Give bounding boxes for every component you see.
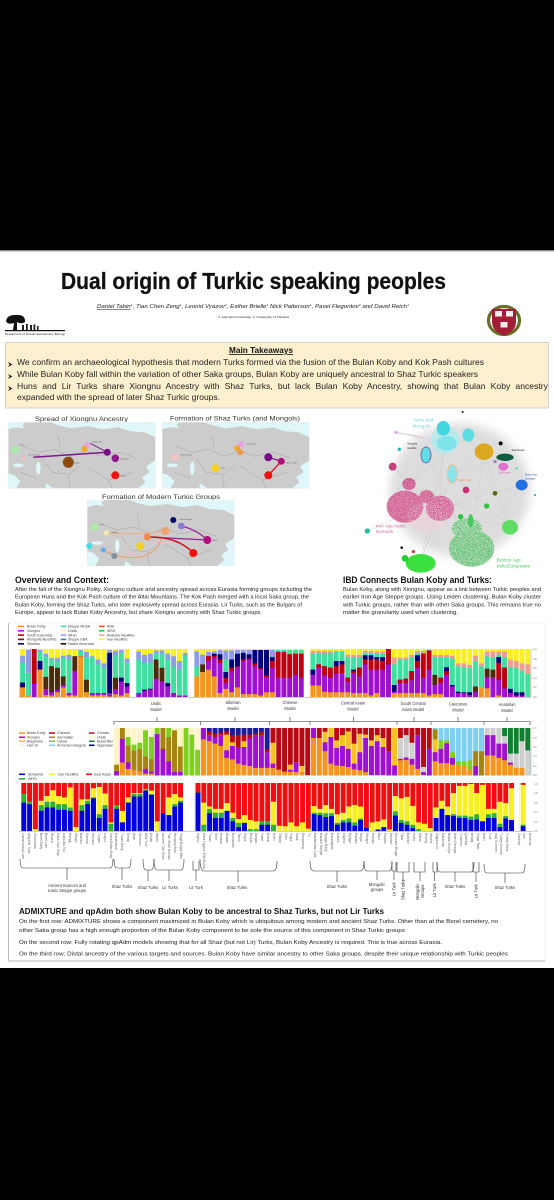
logo: Harvard shield (488, 306, 520, 336)
population labels under third row: Karakhanid (114, 833, 118, 850)
label: Uralic Model: Uralic (151, 701, 161, 706)
label: Caucasus Model (449, 702, 467, 712)
map panel: formation of Shaz Turks (162, 416, 309, 488)
population labels under third row: Bashkir (79, 833, 83, 845)
label: Anatolian Model: Anatolian (498, 702, 516, 707)
label: South Central Asian Model: South Central (400, 701, 426, 706)
population labels under third row: Tian Shan Nomad (167, 833, 171, 860)
legend: ADMIXTURE components: Steppe EBA (68, 638, 88, 642)
third row axis: 1.0 (534, 782, 538, 786)
legend: distal ancestry: East Asian (94, 772, 111, 776)
population labels under third row: Gagauz Lir (435, 833, 439, 850)
chart: IBD network (364, 411, 538, 573)
population labels under third row: Turkey Central (499, 833, 503, 855)
third row description: On the third row: Distal ancestry of the various targets and sources. Bulan Koby have similar ancestry to other Saka groups, despite their unique relationship with Turkic peoples (19, 952, 508, 958)
map panel: formation of modern Turkic groups: Bulgar (111, 531, 118, 534)
map panel: formation of Shaz Turks: Kok Pash (246, 443, 256, 445)
map panel: formation of Shaz Turks: Formation of Shaz Turks (and Mongols) (170, 416, 300, 422)
map panel: spread of Xiongnu ancestry: Spread of Xiongnu Ancestry (35, 416, 129, 423)
population labels under third row: Kyrgyz (348, 833, 352, 843)
label: Anatolian Model (498, 702, 516, 713)
network small labels: Bronze Age (525, 474, 538, 477)
group braces and labels (20, 859, 525, 900)
population labels under third row: Turgen (97, 833, 101, 843)
population labels under third row: Karachay (441, 833, 445, 847)
population labels under third row: Mont Uyghur Elite Burial (202, 833, 206, 869)
text block: IBD connects Bulan Koby and Turks (342, 575, 541, 616)
brace: Mongolic groups: Mongolic (369, 882, 385, 887)
legend: ADMIXTURE components: Bulan Koby (27, 624, 46, 628)
brace: Lir Turk rotated 2 (432, 862, 437, 897)
population labels under third row: Ancient Tian Shan (161, 833, 165, 860)
text block: overview and context: After the fall of the Xiongnu Polity, Xiongnu culture and ancestry spread across Eurasia forming groups including the (15, 587, 312, 593)
population labels under third row: Sardinia (517, 833, 521, 845)
brace: Shaz Turks 6 (484, 864, 525, 890)
label: Chinese Model (282, 700, 298, 711)
population labels under third row: Volga Bulgar Elite (179, 833, 183, 859)
population labels under third row: Buryat (249, 833, 253, 843)
logo: Department of Human Evolutionary Biology (5, 315, 66, 336)
population labels under third row: Turk (488, 833, 492, 840)
population labels under third row: Volga Tatar (476, 833, 480, 850)
label: Central Asian Model (341, 700, 366, 712)
legend: ADMIXTURE components (18, 624, 135, 646)
population labels under third row: Chandman (33, 833, 37, 849)
population labels under third row: Tuvan Early (120, 833, 124, 851)
population labels under third row: Azeri (482, 833, 486, 841)
population labels under third row: Mongol (365, 833, 369, 844)
brace: Shaz Turks 3 (200, 859, 277, 890)
population labels under third row: Saka Ala Too (62, 833, 66, 852)
population labels under third row: Saka Tian Shan (56, 833, 60, 856)
population labels under third row (21, 833, 532, 869)
population labels under third row: Uralic (412, 833, 416, 842)
poster sheet (0, 250, 554, 968)
label: Central Asian Model: Central Asian (341, 700, 366, 706)
label: Caucasus Model: Model (452, 708, 464, 712)
third row axis: 0.6 (534, 801, 538, 805)
label: Chinese Model: Model (284, 706, 296, 711)
legend: qpAdm sources: Sarmatian (57, 735, 73, 739)
population labels under third row: Khanty (424, 833, 428, 844)
chart: second row qpAdm bars (113, 728, 530, 776)
label: Central Asian Model: Model (347, 706, 359, 712)
text block: IBD connects Bulan Koby and Turks: IBD Connects Bulan Koby and Turks: (343, 575, 492, 585)
first row axis: 0.8 (533, 657, 537, 661)
text block: overview and context: Bulan Koby, forming the Shaz Turks, who later explosively spread across Eurasia. Lir Turks, such as the Bulgars of (15, 602, 302, 608)
takeaway 3: Huns and Lir Turks share Xiongnu Ancestry with Shaz Turks, but lack Bulan Koby Ancestry, showing that Bulan Koby ancestry (17, 381, 549, 391)
brace: Shaz Turks 2 (138, 859, 158, 890)
population labels under third row: Lamanovsky Late (21, 833, 25, 859)
label: South Central Asian Model: Asian Model (402, 707, 424, 712)
label: Uralic Model: Model (150, 707, 162, 712)
map panel: spread of Xiongnu ancestry: China (120, 475, 127, 477)
population labels under third row: Salar (295, 833, 299, 842)
model brackets (114, 717, 530, 725)
takeaway 3: expanded with the spread of later Shaz Turkic groups. (17, 392, 220, 402)
text block: IBD connects Bulan Koby and Turks: Bulan Koby, along with Xiongnu, appear as a link between Turkic peoples and (343, 587, 541, 593)
label: South Central Asian Model (400, 701, 426, 712)
population labels under third row: Altai Turk (144, 833, 148, 847)
population labels under third row: Kazakh Steppe (319, 833, 323, 856)
legend: ADMIXTURE components: WHG (68, 633, 77, 637)
first row axis: 0.0 (533, 695, 537, 699)
brace: Lir Turk rotated (392, 862, 396, 896)
authors: Daniel Tabin 1, Tian Chen Zeng 1, Leonid Vyazov 2, Esther Brielle 1 Nick Patterson 1, Pavel Flegontov 2 and David Reich 1 (97, 303, 409, 310)
brace: Shaz Turks 1: Shaz Turks (112, 884, 132, 889)
map panel: formation of Shaz Turks: Saka (220, 467, 226, 469)
legend: ADMIXTURE components: Steppe MLBA (68, 624, 91, 628)
bullet arrows (8, 362, 12, 391)
cluster: Bronze Age Indo-Europeans (400, 503, 518, 573)
population labels under third row: Yugur (289, 833, 293, 843)
third row axis: 0.2 (534, 820, 538, 824)
network small labels (408, 443, 538, 482)
population labels under third row: Even (272, 833, 276, 841)
legend: ADMIXTURE components: Xiongnu (27, 629, 40, 633)
population labels under third row: Kyrgyz Early (324, 833, 328, 852)
population labels under third row: Tuvan (208, 833, 212, 842)
legend: distal ancestry: WHG (28, 777, 37, 781)
population labels under third row: Mansi (418, 833, 422, 842)
population labels under third row: Dolgan (254, 833, 258, 844)
first row axis: 0.2 (533, 685, 537, 689)
population labels under third row: Armenia (528, 833, 532, 845)
population labels under third row: Soyot (243, 833, 247, 842)
label: Siberian Model: Model (227, 706, 239, 711)
first row description (19, 919, 498, 934)
third row axis: 0.8 (534, 791, 538, 795)
map panel: formation of modern Turkic groups (86, 494, 234, 566)
population labels under third row: Tatar (400, 833, 404, 841)
first row description: On the first row: ADMIXTURE shows a component maximized in Bulan Koby which is ubiquitous among modern and ancient Shaz Turks. Other than at the Berel cemetery, no (19, 919, 498, 925)
population labels under third row: Kazakh (354, 833, 358, 844)
population labels under third row: Tofalar (278, 833, 282, 844)
population labels under third row: Uzbek (336, 833, 340, 843)
cluster: gold, dark green, orchid, blue (462, 411, 536, 496)
first row axis: 1.0 (533, 647, 537, 651)
logo: Department of Human Evolutionary Biology: Department of Human Evolutionary Biology (5, 332, 66, 336)
network label: Bronze Age Indo-Europeans (497, 557, 530, 568)
population labels under third row: Hezhen (389, 833, 393, 845)
brace: Shaz Turks 6: Shaz Turks (495, 885, 515, 890)
legend: ADMIXTURE components: Native American (68, 642, 94, 646)
brace: Shaz Turks 5: Shaz Turks (445, 884, 465, 889)
population labels under third row: Qashqai (464, 833, 468, 846)
network label: Iron Age Iranic Nomads: Nomads (376, 529, 394, 534)
chart: first row ADMIXTURE bars (19, 649, 530, 697)
legend: ADMIXTURE components: Uralic (68, 629, 77, 633)
population labels under third row: Balkar Kumyk (447, 833, 451, 854)
population labels under third row: Bashkir (406, 833, 410, 845)
brace: Lir Turk (189, 861, 204, 890)
text block: overview and context: European Huns and the Kok Pash culture of the Altai Mountains. The Kok Pash merged with a local Saka group, the (15, 595, 309, 601)
legend: ADMIXTURE components: South East Asia (27, 633, 52, 637)
network label: Turks and Mongols: Mongols (413, 424, 431, 429)
network small labels: Mongolia (408, 443, 418, 445)
label: Uralic Model (150, 701, 162, 712)
population labels under third row: Nogai (359, 833, 363, 842)
population labels under third row: Shoroon (138, 833, 142, 846)
second row axis (531, 726, 537, 777)
legend: ADMIXTURE components: ANE (107, 624, 115, 628)
model labels and brackets (114, 700, 530, 725)
population labels under third row: Iran (522, 833, 526, 839)
network label: Bronze Age Indo-Europeans: Indo-Europeans (497, 563, 530, 568)
first row axis (19, 647, 537, 699)
map panel: formation of Shaz Turks: Hun Europe (180, 453, 193, 456)
population labels under third row: Uzgur (103, 833, 107, 843)
label: Chinese Model: Chinese (282, 700, 298, 705)
panel frame: ADMIXTURE section (8, 623, 545, 961)
brace: Mongolic Groups rotated (414, 862, 425, 900)
first row axis: 0.4 (533, 676, 537, 680)
third row axis: 0.4 (534, 810, 538, 814)
text block: IBD connects Bulan Koby and Turks: earlier Iron Age Steppe groups. Using Leiden clustering, Bulan Koby cluster (343, 595, 541, 601)
brace: Mongolic groups: groups (371, 887, 383, 892)
first row axis: 0.6 (533, 666, 537, 670)
legend: qpAdm sources (19, 731, 114, 747)
text block: overview and context: Europe, appear to lack Bulan Koby Ancestry, but share Xiongnu ancestry with Shaz Turkic groups. (15, 610, 262, 616)
population labels under third row: Teleut (237, 833, 241, 842)
legend: ADMIXTURE components: WSH (107, 629, 116, 633)
panel: main takeaways (6, 342, 549, 408)
map panel: formation of modern Turkic groups: Shaz (212, 540, 217, 542)
population labels under third row: Khitan (149, 833, 153, 843)
population labels under third row: Mingyi (74, 833, 78, 843)
map panel: spread of Xiongnu ancestry: Saka (74, 462, 80, 464)
population labels under third row: Khakas (219, 833, 223, 844)
population labels under third row: Uyghur (342, 833, 346, 845)
population labels under third row: Evenk (266, 833, 270, 843)
network small labels: Neolithic (408, 447, 417, 450)
legend: qpAdm sources: Chinese (57, 731, 70, 735)
legend: qpAdm sources: Uzbek (57, 739, 67, 743)
affiliations: 1: Harvard University, 2: University of Ostrava (218, 315, 290, 319)
population labels under third row: Kangju (68, 833, 72, 843)
network small labels: Scandinavia (512, 450, 525, 452)
map panel: spread of Xiongnu ancestry: Kok Pash (92, 441, 102, 443)
population labels under third row: Berel Early (39, 833, 43, 849)
brace: Lir Turk: Lir Turk (189, 885, 204, 890)
text block: overview and context (15, 575, 312, 616)
label: Siberian Model (225, 700, 241, 711)
population labels under third row: Berel Late (44, 833, 48, 848)
brace: Shaz Turks rotated (397, 862, 409, 900)
brace: Lir Turk rotated 2: Lir Turk (432, 882, 437, 897)
second row axis: 0.8 (533, 736, 537, 740)
brace: Shaz Turks 1 (112, 859, 132, 889)
first row description: other Saka group has a high enough proportion of the Bulan Koby component to be sole the source of this component in Shaz Turkic groups (19, 928, 405, 934)
legend: ADMIXTURE components: Iran Neolithic (107, 638, 128, 642)
second row axis: 0.2 (533, 764, 537, 768)
network small labels: Caucasus (525, 478, 536, 480)
text block: overview and context: Overview and Context: (15, 575, 109, 585)
legend: qpAdm sources: Xiongnu (27, 735, 40, 739)
brace: Shaz Turks 3: Shaz Turks (227, 885, 247, 890)
population labels under third row: Kimak (126, 833, 130, 843)
section heading: ADMIXTURE and qpAdm both show Bulan Koby to be ancestral to Shaz Turks, but not Lir Turks (19, 906, 384, 916)
label: Caucasus Model: Caucasus (449, 702, 467, 706)
legend: qpAdm sources: Uralic (97, 735, 106, 739)
population labels under third row: Dongxiang (301, 833, 305, 849)
population labels under third row: Nenets (429, 833, 433, 844)
brace: Lir Turks (154, 859, 184, 890)
brace: Shaz Turks 2: Shaz Turks (138, 885, 158, 890)
legend: qpAdm sources: Han III (27, 743, 38, 747)
population labels under third row: Aldy-Bel Tuva (27, 833, 31, 854)
legend: ADMIXTURE components: Siberian (27, 642, 40, 646)
brace: Shaz Turks 4: Shaz Turks (327, 884, 347, 889)
legend: ADMIXTURE components: Mongolia Neolithic (27, 638, 57, 642)
legend: qpAdm sources: Armenia Hotagula (57, 743, 86, 747)
legend: distal ancestry: Iran Neolithic (58, 772, 79, 776)
cluster: Iron Age Iranic Nomads (365, 463, 469, 534)
legend: qpAdm sources: Chuvan (97, 731, 109, 735)
brace: Lir Turk rotated 3 (473, 862, 479, 898)
population labels under third row: Alanic (155, 833, 159, 842)
network small labels: South Asian (498, 472, 511, 475)
population labels under third row: Tu (307, 833, 311, 837)
map panel: formation of modern Turkic groups: Ural (99, 523, 104, 526)
map panel: spread of Xiongnu ancestry: Xiongnu (120, 458, 129, 460)
second row axis: 1.0 (533, 726, 537, 730)
brace: Lir Turk rotated: Lir Turk (392, 881, 396, 896)
title: Dual origin of Turkic speaking peoples (61, 268, 446, 294)
legend: qpAdm sources: Nganasan (97, 743, 113, 747)
population labels under third row: Hungary Avar (173, 833, 177, 854)
network label: Turks and Mongols (413, 418, 434, 429)
third row axis: 0.0 (534, 829, 538, 833)
text block: IBD connects Bulan Koby and Turks: matter the granularity used when clustering. (343, 610, 458, 616)
population labels under third row: Kalmyk (371, 833, 375, 844)
population labels under third row: Uighur (196, 833, 200, 844)
network haze (367, 423, 530, 563)
population labels under third row: Yakut (260, 833, 264, 841)
population labels under third row: Karakalpak (330, 833, 334, 850)
population labels under third row: Saka Bulan Koby (109, 833, 113, 859)
map panel: formation of Shaz Turks: Shaz Turks (286, 461, 298, 464)
map panel: formation of modern Turkic groups: Formation of Modern Turkic Groups (102, 494, 221, 501)
takeaway 3 (17, 381, 549, 402)
population labels under third row: Wusun (50, 833, 54, 843)
network label: Bronze Age Indo-Europeans: Bronze Age (497, 557, 521, 562)
map panel: spread of Xiongnu ancestry: Ural (19, 443, 24, 446)
network label: Iron Age Iranic Nomads (376, 523, 406, 534)
population labels under third row: Altaian (225, 833, 229, 843)
second row axis: 0.0 (533, 773, 537, 777)
brace: Shaz Turks 4 (310, 861, 364, 889)
second row axis: 0.6 (533, 745, 537, 749)
population labels under third row: Xibo (284, 833, 288, 840)
population labels under third row: Kazakhstan Late (313, 833, 317, 858)
brace: Ancient Sources and Iranic Steppe groups: Iranic Steppe groups (48, 888, 86, 893)
takeaway 2: While Bulan Koby fall within the variation of other Saka groups, Bulan Koby are uniquely ancestral to Shaz Turkic speakers (17, 369, 478, 379)
brace: Ancient Sources and Iranic Steppe groups: Ancient Sources and (48, 883, 87, 888)
brace: Mongolic groups (364, 861, 392, 892)
population labels under third row: Oroqen (383, 833, 387, 844)
label: Anatolian Model: Model (501, 708, 513, 713)
population labels under third row: Avar (132, 833, 136, 841)
legend: qpAdm sources: Bulan Koby (27, 731, 46, 735)
map panel: spread of Xiongnu ancestry: Hun Europe (28, 453, 41, 456)
population labels under third row: Kumandin (231, 833, 235, 848)
brace: Lir Turks: Lir Turks (162, 885, 178, 890)
population labels under third row: Chuvash Bulgar (394, 833, 398, 857)
population labels under third row: Sarmat (85, 833, 89, 844)
chart: third row distal ancestry bars (21, 783, 526, 831)
legend: distal ancestry (19, 772, 112, 782)
population labels under third row: Turkey West (505, 833, 509, 851)
legend: ADMIXTURE components: Anatolia Neolithic (107, 633, 135, 637)
population labels under third row: Iraq Turkmen (494, 833, 498, 853)
population labels under third row: Turkmen (459, 833, 463, 846)
network small labels: Bulan Koby (459, 480, 472, 482)
text block: ADMIXTURE and qpAdm conclusions (19, 906, 508, 958)
takeaway 1: We confirm an archaeological hypothesis that modern Turks formed via the fusion of the Bulan Koby and Kok Pash cultures (17, 357, 484, 367)
brace: Shaz Turks 5 (437, 862, 474, 889)
label: Siberian Model: Siberian (225, 700, 241, 705)
brace: Mongolic Groups rotated: Mongolic (415, 884, 420, 900)
population labels under third row: Daur (377, 833, 381, 841)
network label: Iron Age Iranic Nomads: Iron Age Iranic (376, 523, 406, 528)
legend: qpAdm sources: Baigetobe (27, 739, 43, 743)
third row axis (19, 782, 538, 833)
takeaways heading: Main Takeaways (229, 346, 294, 355)
map panel: spread of Xiongnu ancestry (8, 416, 155, 488)
brace: Shaz Turks rotated: Shaz Turks (400, 880, 406, 900)
population labels under third row: Azeri Georgia (453, 833, 457, 853)
second row axis: 0.4 (533, 754, 537, 758)
text block: IBD connects Bulan Koby and Turks: with Turkic groups, rather than with other Saka groups. This remains true no (342, 602, 541, 608)
cluster: Turks and Mongols (394, 421, 474, 483)
second row description: On the second row: Fully rotating qpAdm models showing that for all Shaz (but not Lir) Turks, Bulan Koby Ancestry is required. This is true across Eurasia. (19, 940, 442, 946)
population labels under third row: Shor (214, 833, 218, 841)
brace: Mongolic Groups rotated: Groups (420, 885, 425, 898)
map panel: formation of modern Turkic groups: Yakut Dolgan (179, 518, 193, 521)
legend: qpAdm sources: Butterfiller (97, 739, 114, 743)
brace: Lir Turk rotated 3: Lir Turk (474, 883, 478, 898)
population labels under third row: Khalaj (470, 833, 474, 842)
legend: distal ancestry: Sintashta (28, 772, 43, 776)
population labels under third row: Samara (91, 833, 95, 845)
brace: Ancient Sources and Iranic Steppe groups (20, 859, 113, 893)
network label: Turks and Mongols: Turks and (413, 418, 434, 423)
